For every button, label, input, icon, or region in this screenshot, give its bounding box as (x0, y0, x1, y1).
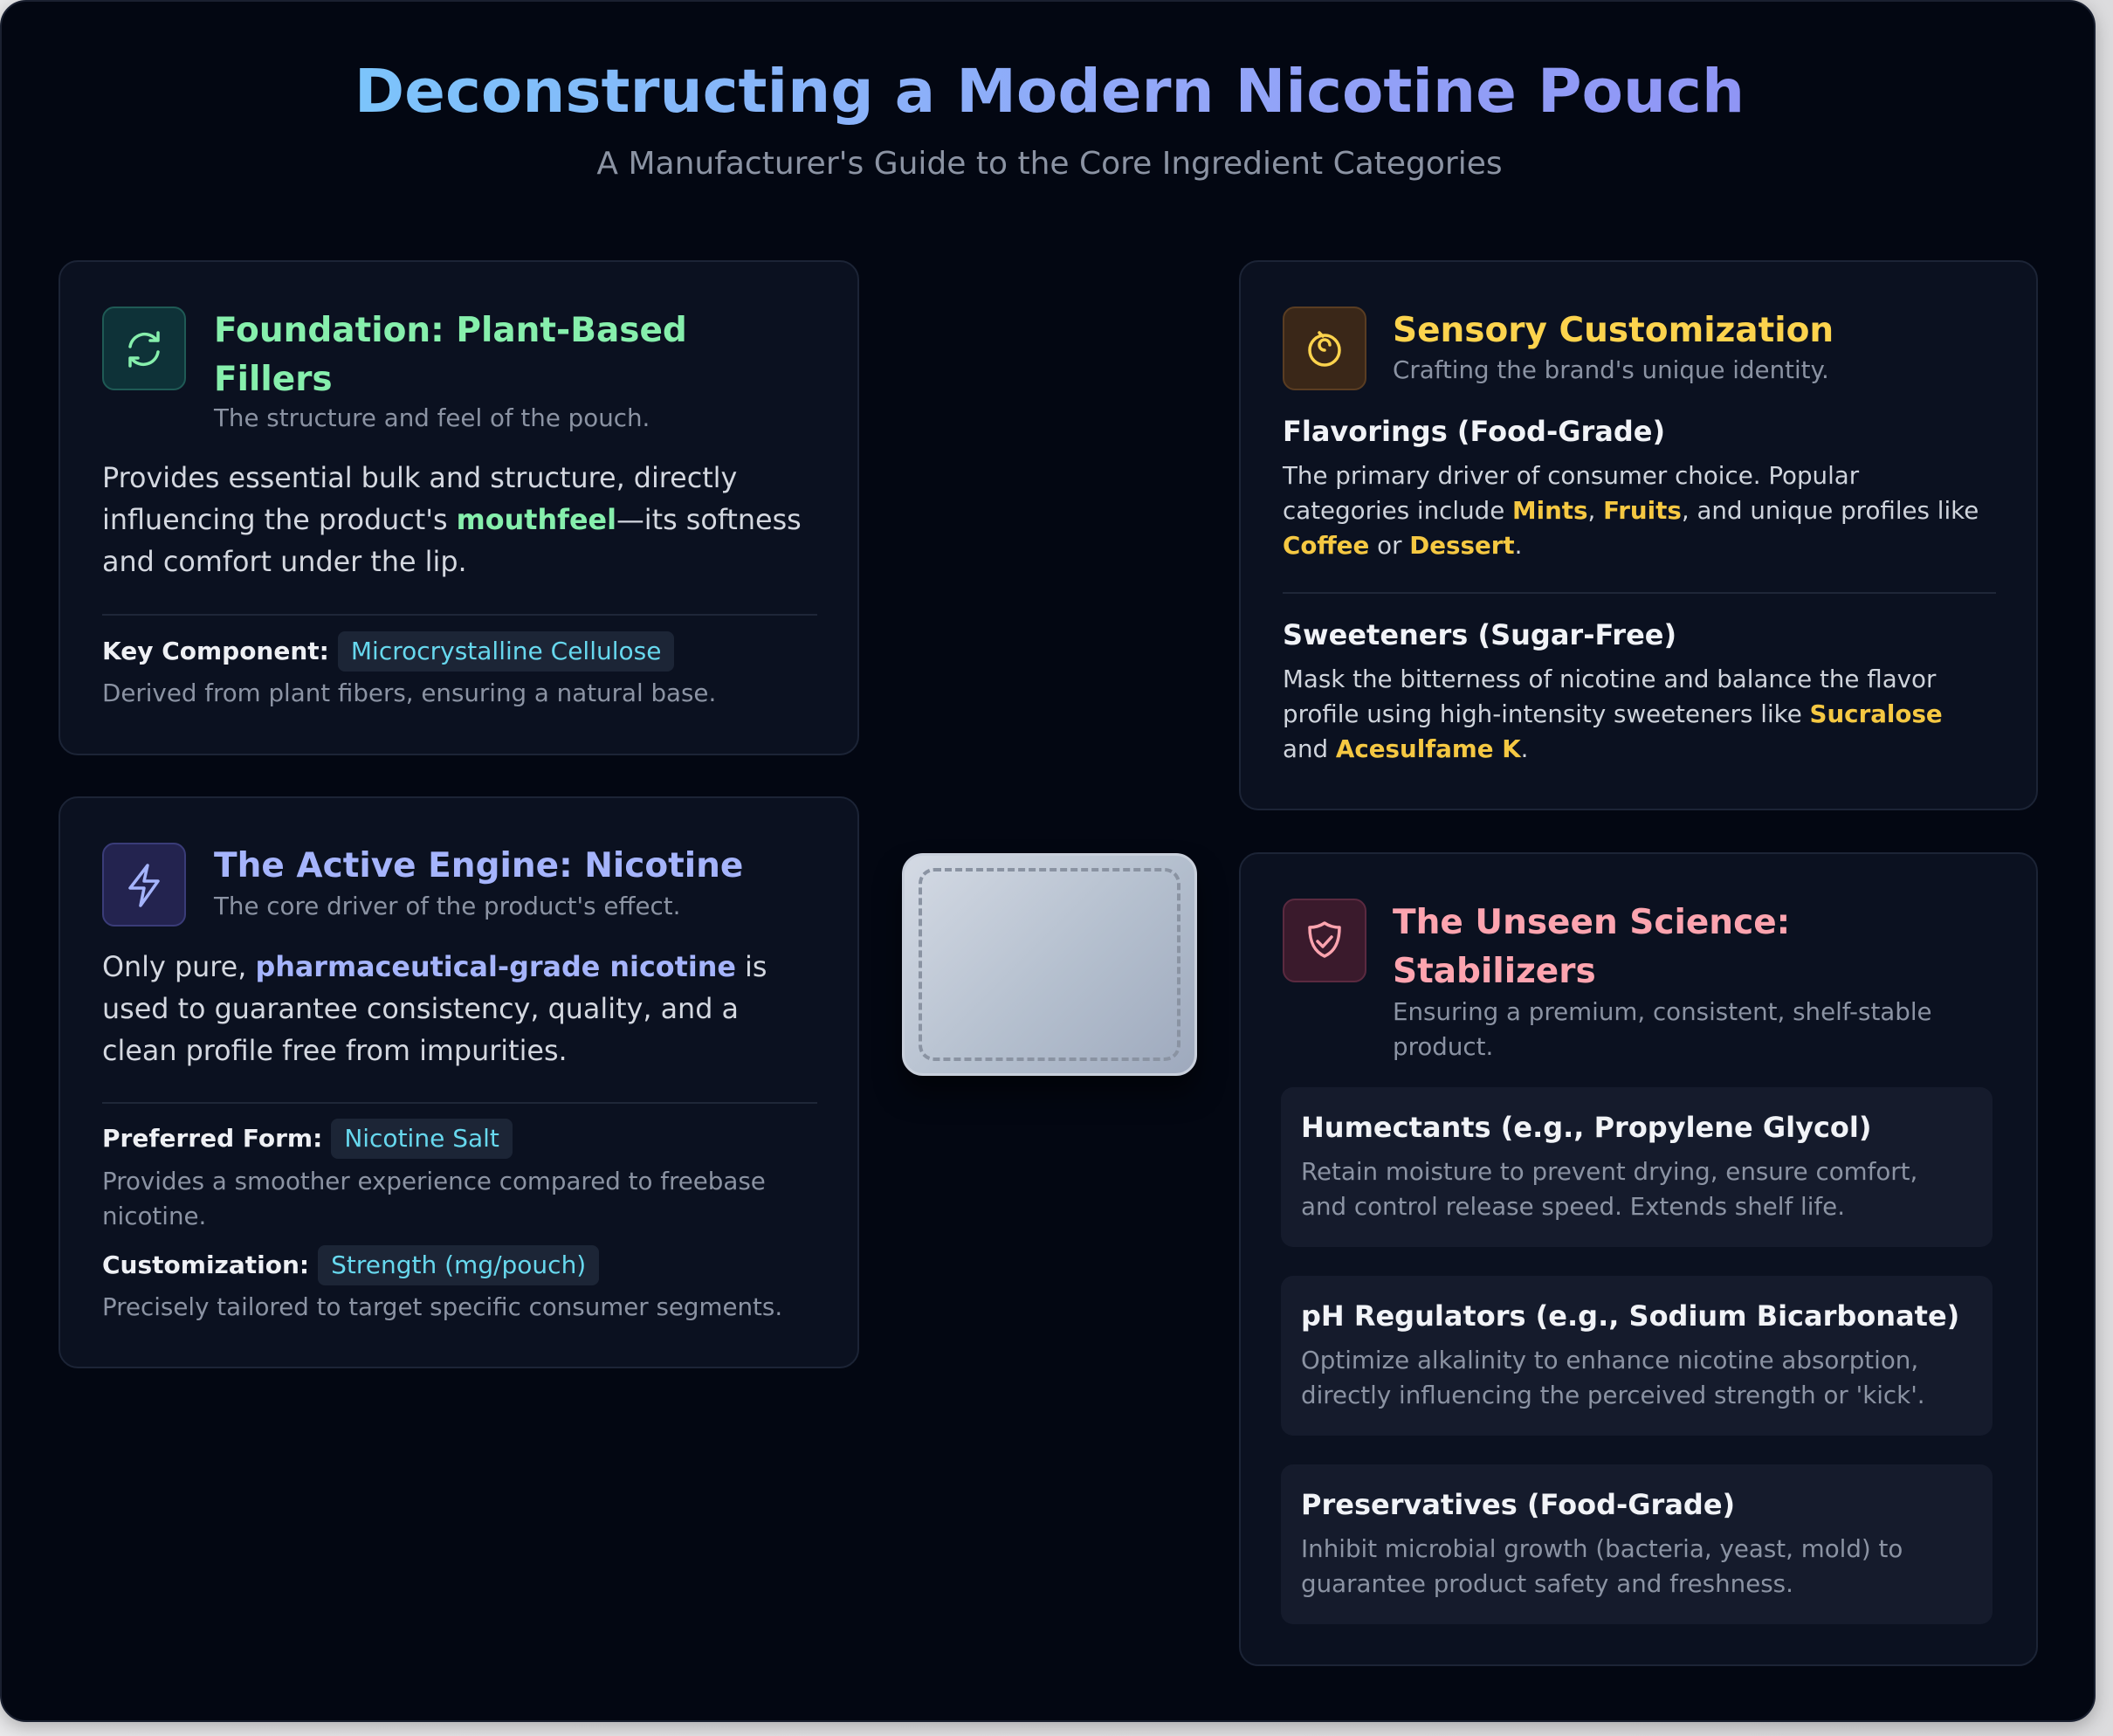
heading (214, 311, 687, 399)
pH regulators box: directly influencing the perceived strength or 'kick'. (1301, 1381, 1925, 1409)
preservatives box: guarantee product safety and freshness. (1301, 1569, 1793, 1598)
body text (102, 951, 767, 1067)
panel: active engine nicotine (59, 796, 859, 1368)
humectants box: Humectants (e.g., Propylene Glycol) (1301, 1111, 1872, 1144)
preservatives box: Preservatives (Food-Grade) (1301, 1488, 1735, 1521)
form description: Provides a smoother experience compared to freebase (102, 1167, 766, 1195)
panel: stabilizers (1239, 852, 2038, 1666)
body text: Provides essential bulk and structure, directly (102, 462, 737, 494)
icon: shield (1283, 899, 1366, 982)
pH regulators box (1281, 1276, 1993, 1436)
preferred form: Preferred Form: (102, 1124, 322, 1153)
icon: pouch illustration (902, 853, 1197, 1076)
heading: The Unseen Science: (1393, 903, 1790, 942)
preservatives box: Inhibit microbial growth (bacteria, yeast, mold) to (1301, 1534, 1903, 1563)
heading (1393, 903, 1790, 991)
body text: used to guarantee consistency, quality, and a (102, 993, 739, 1025)
preservatives box (1281, 1464, 1993, 1624)
flavorings text: Coffee or Dessert. (1283, 531, 1522, 560)
panel: foundation fillers (59, 260, 859, 755)
key component: Key Component: (102, 637, 329, 665)
heading: Foundation: Plant-Based (214, 311, 687, 350)
sweeteners text: profile using high-intensity sweeteners like Sucralose (1283, 699, 1943, 728)
title: Deconstructing a Modern Nicotine Pouch (354, 57, 1745, 127)
flavorings: Flavorings (Food-Grade) (1283, 415, 1665, 448)
key component: Microcrystalline Cellulose (351, 637, 661, 665)
humectants box (1281, 1087, 1993, 1247)
flavorings text: categories include Mints, Fruits, and unique profiles like (1283, 496, 1979, 525)
humectants box: and control release speed. Extends shelf life. (1301, 1192, 1845, 1221)
panel: sensory customization (1239, 260, 2038, 810)
icon: flavor swirl (1283, 307, 1366, 390)
customization: Strength (mg/pouch) (331, 1250, 586, 1279)
pH regulators box: Optimize alkalinity to enhance nicotine absorption, (1301, 1346, 1918, 1374)
heading: Stabilizers (1393, 952, 1596, 991)
sweeteners text (1283, 665, 1943, 763)
preferred form: Nicotine Salt (344, 1124, 499, 1153)
sweeteners: Sweeteners (Sugar-Free) (1283, 618, 1676, 651)
pH regulators box: pH Regulators (e.g., Sodium Bicarbonate) (1301, 1299, 1959, 1333)
customization description: Precisely tailored to target specific consumer segments. (102, 1292, 782, 1321)
sweeteners text: and Acesulfame K. (1283, 734, 1528, 763)
humectants box: Retain moisture to prevent drying, ensure comfort, (1301, 1157, 1917, 1186)
subheading: Crafting the brand's unique identity. (1393, 355, 1829, 384)
subtitle: A Manufacturer's Guide to the Core Ingredient Categories (596, 146, 1503, 182)
flavorings text: The primary driver of consumer choice. Popular (1283, 461, 1859, 490)
customization: Customization: (102, 1250, 309, 1279)
subheading: The core driver of the product's effect. (214, 892, 680, 920)
heading: Sensory Customization (1393, 311, 1834, 350)
heading: Fillers (214, 360, 333, 399)
body text: clean profile free from impurities. (102, 1035, 568, 1067)
body text: and comfort under the lip. (102, 546, 467, 578)
sweeteners text: Mask the bitterness of nicotine and balance the flavor (1283, 665, 1936, 693)
subheading: Ensuring a premium, consistent, shelf-stable (1393, 997, 1932, 1026)
subheading: The structure and feel of the pouch. (214, 403, 650, 432)
icon: lightning (102, 843, 186, 927)
subheading: product. (1393, 1032, 1493, 1061)
form description (102, 1167, 766, 1230)
flavorings text (1282, 461, 1979, 560)
preferred form (102, 1119, 513, 1159)
key component (102, 631, 674, 672)
subheading (1393, 997, 1932, 1061)
body text (102, 462, 802, 578)
form description: nicotine. (102, 1202, 206, 1230)
component description: Derived from plant fibers, ensuring a natural base. (102, 679, 716, 707)
body text: Only pure, pharmaceutical-grade nicotine is (102, 951, 767, 983)
heading: The Active Engine: Nicotine (214, 846, 743, 885)
body text: influencing the product's mouthfeel—its softness (102, 504, 802, 536)
icon: recycle arrows (102, 307, 186, 390)
customization (102, 1245, 599, 1285)
